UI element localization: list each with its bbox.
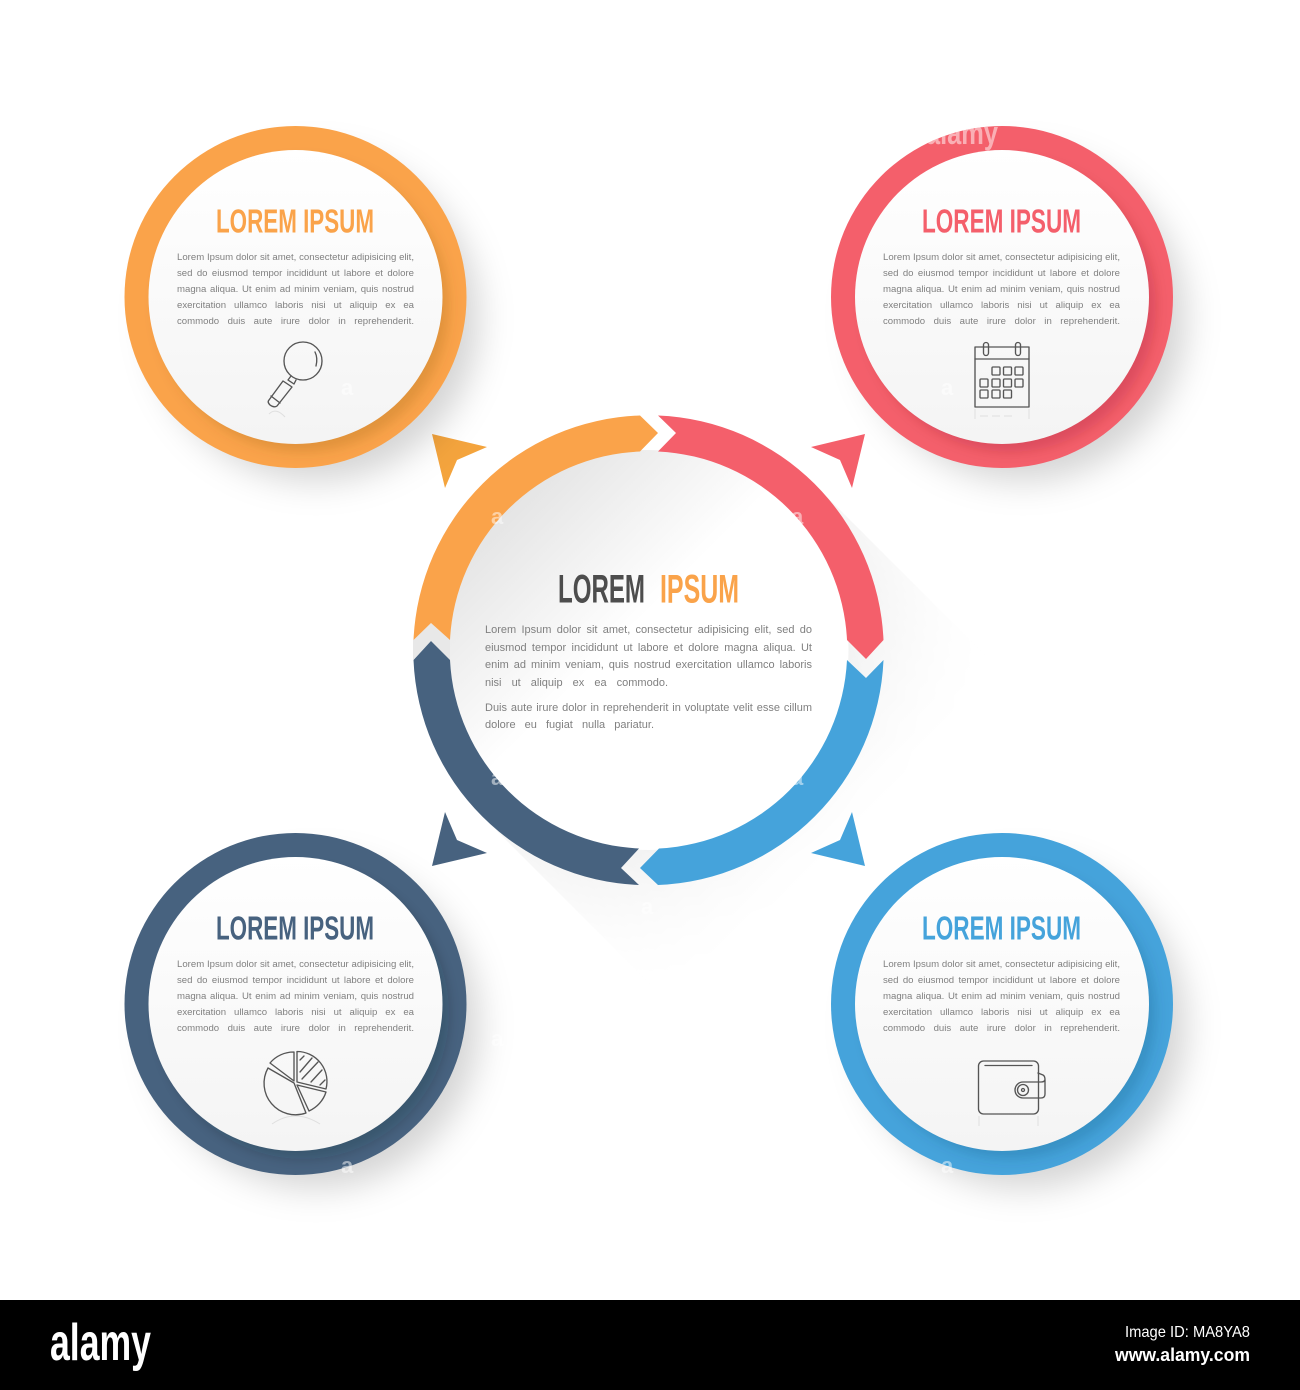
body text: exercitation ullamco laboris nisi ut aliquip ex ea (883, 300, 1120, 310)
footer bar (0, 1300, 1300, 1390)
icon: pie chart (264, 1052, 327, 1124)
stock watermark marks: alamy (926, 115, 998, 151)
body text: exercitation ullamco laboris nisi ut aliquip ex ea (883, 1006, 1120, 1018)
panel: navy circle (124, 833, 479, 1188)
arrow: navy pointer (432, 812, 487, 866)
center heading: LOREM (558, 568, 645, 612)
center body text: Duis aute irure dolor in reprehenderit in voluptate velit esse cillum (485, 702, 812, 714)
body text: commodo duis aute irure dolor in reprehenderit. (177, 316, 414, 326)
heading: LOREM IPSUM (216, 910, 374, 946)
ring segment: orange arrow (414, 416, 658, 640)
icon: calendar (975, 342, 1029, 419)
central white disc (448, 450, 848, 850)
ring segment: red arrow (658, 416, 884, 659)
stock watermark marks: a (491, 1026, 504, 1051)
center body text: enim ad minim veniam, quis nostrud exercitation ullamco laboris (485, 659, 812, 671)
center body text: eiusmod tempor incididunt ut labore et dolore magna aliqua. Ut (485, 642, 812, 654)
panel: central ring (413, 416, 884, 885)
icon: wallet (978, 1061, 1045, 1126)
stock watermark marks: a (491, 765, 504, 790)
stock watermark marks: a (341, 1153, 354, 1178)
stock watermark marks: a (641, 894, 654, 919)
center body text: Lorem Ipsum dolor sit amet, consectetur adipisicing elit, sed do (485, 624, 812, 636)
body text: magna aliqua. Ut enim ad minim veniam, quis nostrud (177, 284, 414, 294)
panel: blue circle (831, 833, 1186, 1188)
center body text (485, 622, 820, 742)
body text (883, 956, 1128, 1040)
body text: magna aliqua. Ut enim ad minim veniam, quis nostrud (177, 990, 414, 1002)
center body text: dolore eu fugiat nulla pariatur. (485, 719, 654, 731)
heading: LOREM IPSUM (216, 202, 374, 240)
long shadow of central ring (498, 500, 884, 884)
body text: magna aliqua. Ut enim ad minim veniam, quis nostrud (883, 284, 1120, 294)
heading: LOREM IPSUM (922, 202, 1081, 240)
arrow: red pointer (811, 434, 865, 488)
stock watermark marks: a (341, 375, 354, 400)
body text (883, 250, 1128, 334)
body text: sed do eiusmod tempor incididunt ut labore et dolore (177, 974, 414, 986)
center body text: nisi ut aliquip ex ea commodo. (485, 677, 668, 689)
icon: magnifier (268, 342, 322, 417)
body text: Lorem Ipsum dolor sit amet, consectetur adipisicing elit, (177, 958, 414, 970)
heading: LOREM IPSUM (922, 910, 1081, 946)
body text: exercitation ullamco laboris nisi ut aliquip ex ea (177, 300, 414, 310)
body text: sed do eiusmod tempor incididunt ut labore et dolore (883, 268, 1120, 278)
panel: orange circle (124, 126, 479, 481)
stock watermark marks: a (791, 504, 804, 529)
website: www.alamy.com (1114, 1345, 1250, 1365)
body text: commodo duis aute irure dolor in reprehenderit. (177, 1022, 414, 1034)
body text: magna aliqua. Ut enim ad minim veniam, quis nostrud (883, 990, 1120, 1002)
body text (177, 250, 422, 334)
body text (177, 956, 422, 1040)
body text: sed do eiusmod tempor incididunt ut labore et dolore (177, 268, 414, 278)
body text: Lorem Ipsum dolor sit amet, consectetur adipisicing elit, (883, 252, 1120, 262)
body text: commodo duis aute irure dolor in reprehenderit. (883, 316, 1120, 326)
panel: red circle (831, 126, 1186, 481)
image id: Image ID: MA8YA8 (1125, 1324, 1250, 1341)
body text: Lorem Ipsum dolor sit amet, consectetur adipisicing elit, (883, 958, 1120, 970)
body text: commodo duis aute irure dolor in reprehenderit. (883, 1022, 1120, 1034)
stock watermark marks: a (941, 1153, 954, 1178)
body text: exercitation ullamco laboris nisi ut aliquip ex ea (177, 1006, 414, 1018)
center heading: IPSUM (660, 568, 739, 612)
stock watermark marks: a (491, 504, 504, 529)
stock watermark marks (341, 115, 998, 1178)
stock watermark marks: a (941, 375, 954, 400)
arrow: blue pointer (811, 812, 865, 866)
footer logo: alamy (50, 1314, 151, 1372)
ring gap shade (413, 623, 450, 660)
stock watermark marks: a (791, 765, 804, 790)
arrow: orange pointer (432, 434, 487, 488)
ring segment: navy arrow (414, 641, 639, 885)
body text: Lorem Ipsum dolor sit amet, consectetur adipisicing elit, (177, 252, 414, 262)
ring segment: blue arrow (640, 660, 884, 885)
body text: sed do eiusmod tempor incididunt ut labore et dolore (883, 974, 1120, 986)
